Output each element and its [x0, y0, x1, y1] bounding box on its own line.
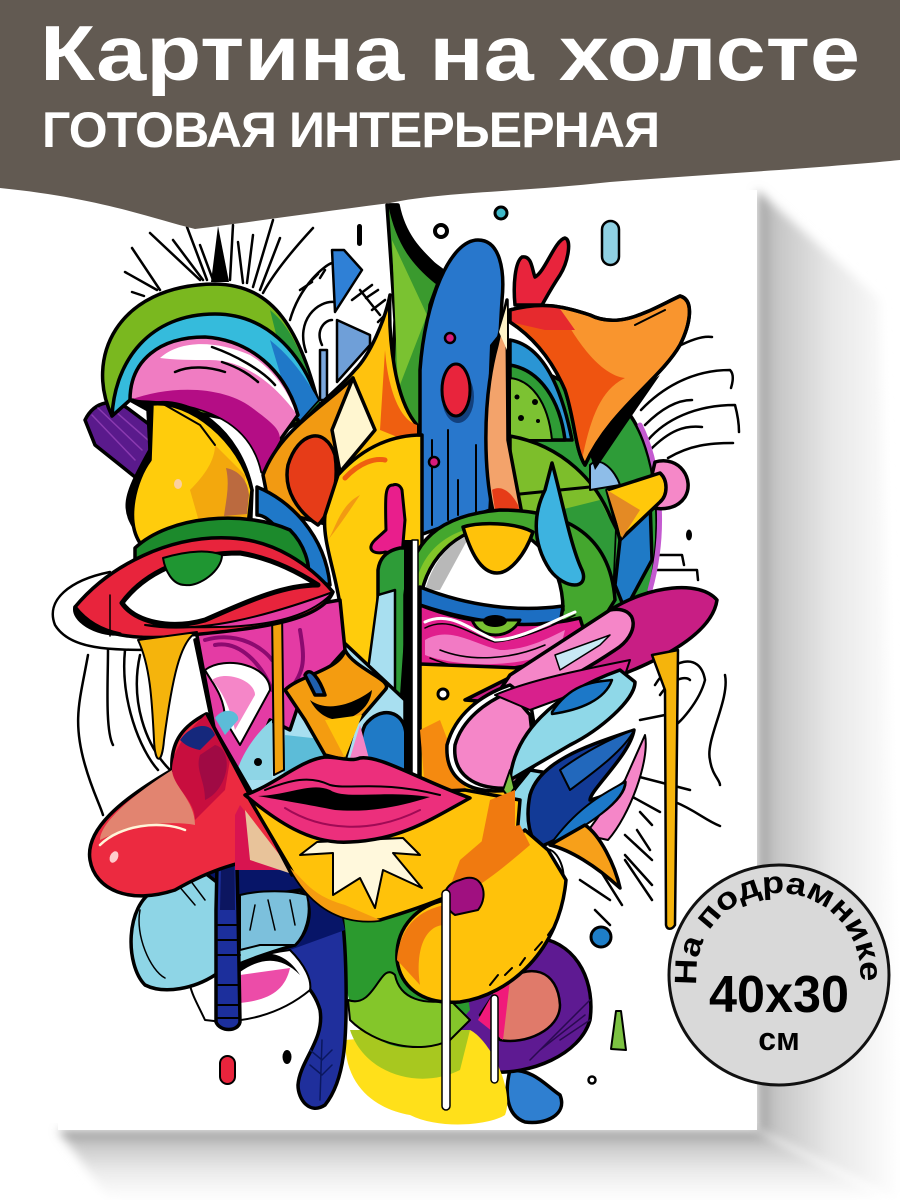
- canvas shadow: [58, 190, 900, 1200]
- white sticks: [442, 890, 498, 1110]
- red Y splash: [514, 238, 569, 305]
- teeth: [300, 838, 422, 908]
- banner: [0, 0, 900, 229]
- green arch and white dome: [405, 510, 615, 800]
- green spike: [387, 205, 442, 432]
- lower purple ring and blue blob: [447, 938, 591, 1123]
- light blue blob: [131, 873, 309, 990]
- size badge: [668, 864, 890, 1086]
- canvas: [58, 190, 757, 1130]
- central yellow face: [300, 435, 422, 730]
- right green disc: [510, 340, 659, 640]
- orange trumpet: [510, 296, 689, 470]
- nose center: [285, 650, 406, 785]
- peach spike: [486, 300, 525, 530]
- left cheek: [195, 600, 405, 800]
- blue blades: [507, 730, 646, 888]
- line art: rays and curves: [53, 220, 739, 925]
- right yellow curve: [397, 825, 566, 1002]
- yellow face right: [420, 664, 520, 850]
- badge arc text: На подрамнике: [674, 876, 877, 983]
- lips: [245, 757, 470, 842]
- subtitle: ГОТОВАЯ ИНТЕРЬЕРНАЯ: [42, 102, 660, 158]
- yellow drip left: [138, 632, 197, 759]
- left eye: [75, 487, 333, 638]
- title: Картина на холсте: [40, 9, 860, 97]
- blue shards: [320, 250, 370, 400]
- magenta oval blade: [465, 588, 717, 705]
- blue stick: [216, 817, 240, 1030]
- center vertical bar: [404, 540, 448, 790]
- badge size: 40х30: [709, 966, 849, 1024]
- navy tail: [200, 850, 346, 1108]
- painting: abstract face: [53, 205, 739, 1124]
- badge unit: см: [758, 1021, 800, 1057]
- black spike: [211, 226, 229, 282]
- yellow spike and fan: [263, 295, 417, 525]
- yellow nose blob: [127, 400, 252, 560]
- pink circle and yellow cone: [607, 461, 688, 540]
- right eye: [420, 605, 590, 680]
- small floating shapes: [220, 207, 692, 1084]
- small eye lower left: [190, 950, 310, 1021]
- purple heart: [85, 403, 150, 480]
- yellow drip right: [652, 650, 678, 929]
- arches: [103, 284, 320, 472]
- blue pill: [420, 240, 503, 535]
- cyan teardrop: [536, 463, 584, 585]
- pink and cyan blades: [447, 660, 635, 798]
- yellow jaw: [250, 790, 520, 921]
- tongue: [90, 714, 295, 896]
- green neck and yellow base: [343, 880, 507, 1124]
